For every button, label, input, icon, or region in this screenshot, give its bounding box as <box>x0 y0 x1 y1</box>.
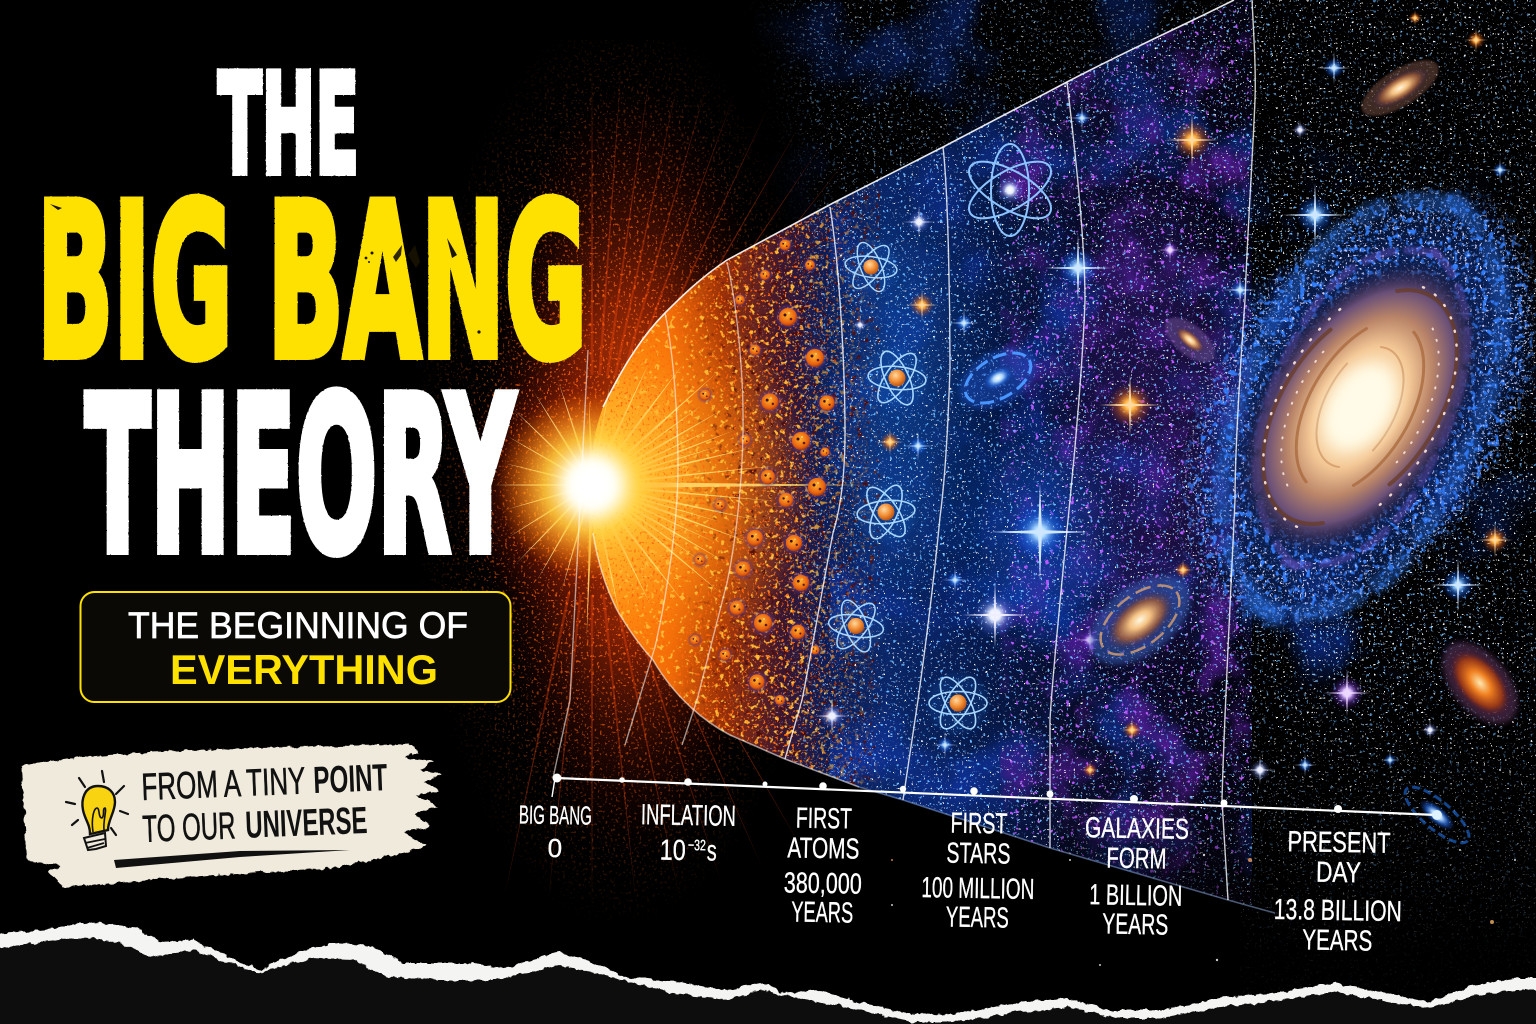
label: first stars <box>921 807 1036 935</box>
cone outer edge <box>593 0 1275 913</box>
cool star speckle <box>720 0 1260 915</box>
callout text line 2: TO OUR <box>142 805 236 851</box>
timeline <box>552 774 1442 820</box>
label: present day: PRESENT <box>1287 826 1391 860</box>
explosion glow behind the dome <box>420 40 852 920</box>
hot plasma gradient <box>593 312 807 658</box>
label: galaxies form: GALAXIES <box>1085 812 1189 846</box>
icon: atom 6 large <box>945 124 1075 256</box>
title: THE <box>218 44 359 206</box>
dust lanes <box>1221 250 1499 564</box>
label: galaxies form: YEARS <box>1102 908 1169 942</box>
icon: atom 2 <box>864 345 930 411</box>
galaxy outer blue star clumps <box>1176 182 1536 633</box>
label: big bang: BIG BANG <box>519 799 592 831</box>
torn paper bottom edge <box>0 922 1536 1024</box>
icon: atom 4 <box>824 593 888 659</box>
galaxy: timeline end blue <box>1397 779 1477 851</box>
title: THEORY <box>85 350 516 602</box>
dust stars above the cone <box>752 0 1536 711</box>
label: inflation: 10 <box>660 835 686 867</box>
icon: light bulb <box>66 771 128 850</box>
main spiral galaxy <box>1176 182 1536 633</box>
label: inflation: −32 <box>688 837 706 854</box>
label: present day: YEARS <box>1302 924 1373 958</box>
label: galaxies form: 1 BILLION <box>1089 879 1183 913</box>
soft blue arms <box>1138 152 1536 662</box>
epoch boundary lines <box>553 0 1255 900</box>
golden disc <box>1194 220 1526 594</box>
callout text line 1: POINT <box>313 757 388 802</box>
label: first stars: FIRST <box>950 808 1008 841</box>
red spark streaks <box>503 65 852 905</box>
proto-atom orange balls <box>687 237 839 708</box>
label: first atoms: FIRST <box>796 803 852 835</box>
bright stars <box>814 10 1513 785</box>
label: inflation: INFLATION <box>641 799 736 833</box>
label: first atoms: ATOMS <box>787 832 860 866</box>
galaxy: small blue spiral <box>949 334 1047 422</box>
subtitle box <box>80 592 510 702</box>
text: BIG BANG <box>37 158 587 406</box>
singularity core glow <box>497 390 687 580</box>
title <box>37 44 587 602</box>
atoms <box>824 124 1075 734</box>
fade the cone tail under the timeline <box>1060 796 1252 905</box>
subtitle line 2: EVERYTHING <box>170 646 438 693</box>
label: first atoms: 380,000 <box>783 867 862 901</box>
label: first atoms: YEARS <box>791 896 854 930</box>
sparse stars under the timeline <box>891 769 1516 966</box>
galaxy: lower right orange <box>1428 628 1532 738</box>
orange plasma speckle <box>602 186 882 790</box>
label: big bang <box>518 799 592 864</box>
galaxy: centre-right tan spiral <box>1073 557 1207 683</box>
label: inflation <box>640 799 736 868</box>
expanding universe cone <box>580 0 1260 915</box>
brush underline <box>114 850 350 868</box>
right deep field stars <box>1240 0 1536 1024</box>
callout text line 2 <box>142 800 368 851</box>
blue and violet nebula clouds <box>830 0 1260 915</box>
label: first stars: 100 MILLION <box>921 872 1035 906</box>
nebula dust above and right of the cone <box>769 0 1536 692</box>
label: inflation: s <box>707 835 717 868</box>
galaxy: top right <box>1353 49 1447 127</box>
yellow ink scratches <box>50 204 481 334</box>
galaxy: small mauve spiral <box>1157 309 1223 371</box>
icon: atom 1 <box>840 236 902 298</box>
callout text line 1: FROM A TINY <box>141 760 306 809</box>
label: first stars: YEARS <box>946 901 1009 935</box>
label: present day: DAY <box>1316 857 1361 889</box>
label: present day <box>1273 826 1403 958</box>
label: galaxies form: FORM <box>1106 842 1167 876</box>
radial light rays from singularity <box>493 361 864 638</box>
icon: atom 5 <box>928 672 988 734</box>
label: first atoms <box>783 802 863 930</box>
label: big bang: 0 <box>547 833 562 863</box>
timeline labels <box>518 799 1403 958</box>
label: galaxies form <box>1083 812 1189 942</box>
icon: atom 3 <box>853 479 919 545</box>
callout text line 2: UNIVERSE <box>245 800 368 847</box>
label: present day: 13.8 BILLION <box>1274 894 1402 928</box>
brush stroke callout <box>22 744 442 887</box>
subtitle line 1: THE BEGINNING OF <box>128 605 468 646</box>
dark soot in plasma <box>680 170 880 820</box>
label: first stars: STARS <box>946 837 1011 871</box>
